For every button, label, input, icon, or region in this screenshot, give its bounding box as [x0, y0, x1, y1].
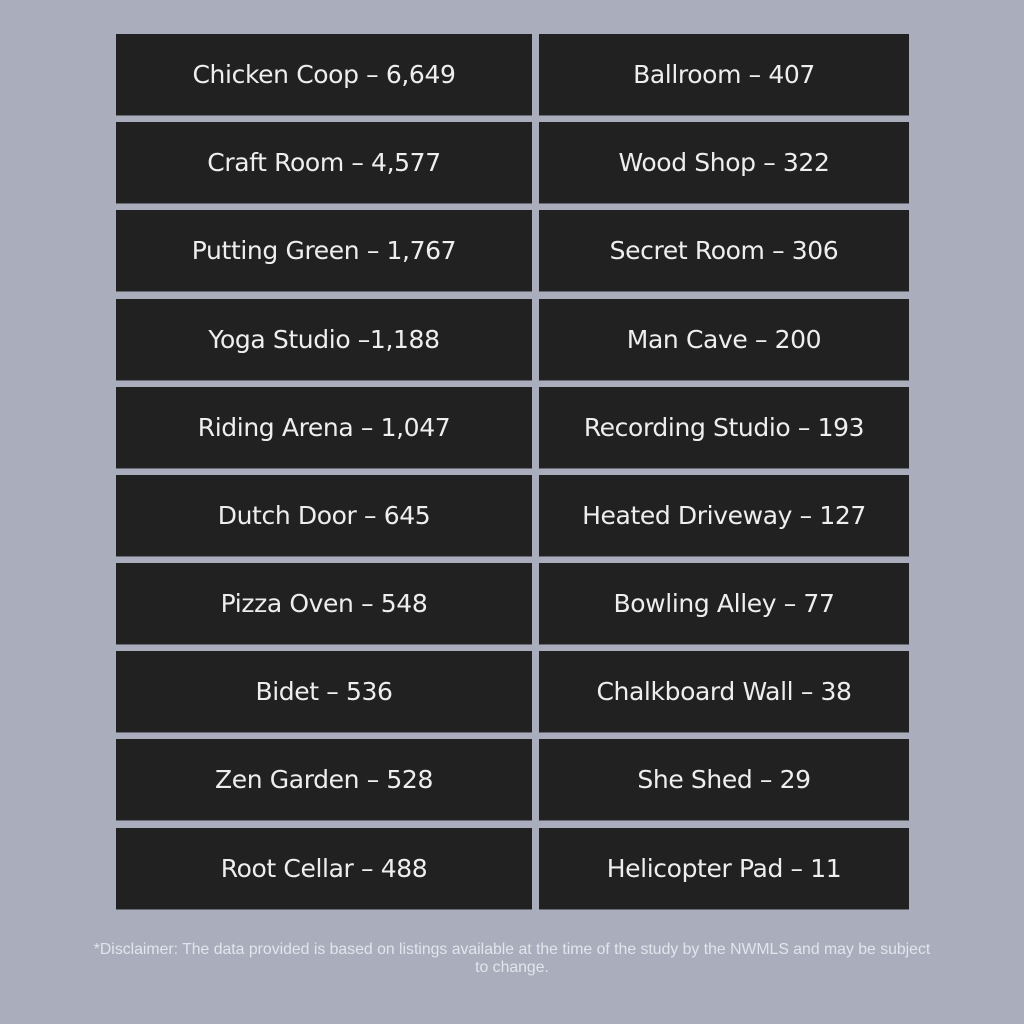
row: Helicopter Pad: Helicopter Pad – 11	[607, 854, 841, 883]
disclaimer	[94, 941, 930, 976]
disclaimer: to change.	[475, 959, 549, 976]
disclaimer: *Disclaimer: The data provided is based on listings available at the time of the study by the NWMLS and may be subject	[94, 941, 930, 958]
row: Yoga Studio: Yoga Studio –1,188	[208, 325, 440, 354]
row: Putting Green: Putting Green – 1,767	[192, 236, 456, 265]
row: Dutch Door: Dutch Door – 645	[218, 501, 430, 530]
row: Man Cave: Man Cave – 200	[627, 325, 821, 354]
row: Chicken Coop: Chicken Coop – 6,649	[192, 60, 456, 89]
row: Secret Room: Secret Room – 306	[610, 236, 838, 265]
row: Man Cave	[539, 299, 909, 381]
row: Zen Garden	[116, 739, 532, 821]
row: Putting Green	[116, 210, 532, 292]
row: Heated Driveway: Heated Driveway – 127	[582, 501, 866, 530]
row: Craft Room: Craft Room – 4,577	[207, 148, 441, 177]
row: Helicopter Pad	[539, 828, 909, 910]
row: She Shed: She Shed – 29	[637, 765, 811, 794]
row: Ballroom: Ballroom – 407	[633, 60, 815, 89]
row: Recording Studio: Recording Studio – 193	[584, 413, 864, 442]
row: Heated Driveway	[539, 475, 909, 557]
row: Root Cellar	[116, 828, 532, 910]
row: Secret Room	[539, 210, 909, 292]
row: Chalkboard Wall	[539, 651, 909, 733]
row: Chicken Coop	[116, 34, 532, 116]
row: Ballroom	[539, 34, 909, 116]
row: She Shed	[539, 739, 909, 821]
row: Wood Shop	[539, 122, 909, 204]
row: Chalkboard Wall: Chalkboard Wall – 38	[596, 677, 852, 706]
row: Riding Arena: Riding Arena – 1,047	[198, 413, 450, 442]
table of features	[116, 34, 909, 910]
row: Bidet: Bidet – 536	[255, 677, 393, 706]
row: Yoga Studio	[116, 299, 532, 381]
row: Bidet	[116, 651, 532, 733]
row: Bowling Alley	[539, 563, 909, 645]
row: Wood Shop: Wood Shop – 322	[619, 148, 829, 177]
row: Recording Studio	[539, 387, 909, 469]
row: Riding Arena	[116, 387, 532, 469]
row: Pizza Oven	[116, 563, 532, 645]
row: Craft Room	[116, 122, 532, 204]
row: Root Cellar: Root Cellar – 488	[221, 854, 427, 883]
row: Zen Garden: Zen Garden – 528	[215, 765, 433, 794]
row: Dutch Door	[116, 475, 532, 557]
row: Pizza Oven: Pizza Oven – 548	[221, 589, 427, 618]
row: Bowling Alley: Bowling Alley – 77	[614, 589, 834, 618]
